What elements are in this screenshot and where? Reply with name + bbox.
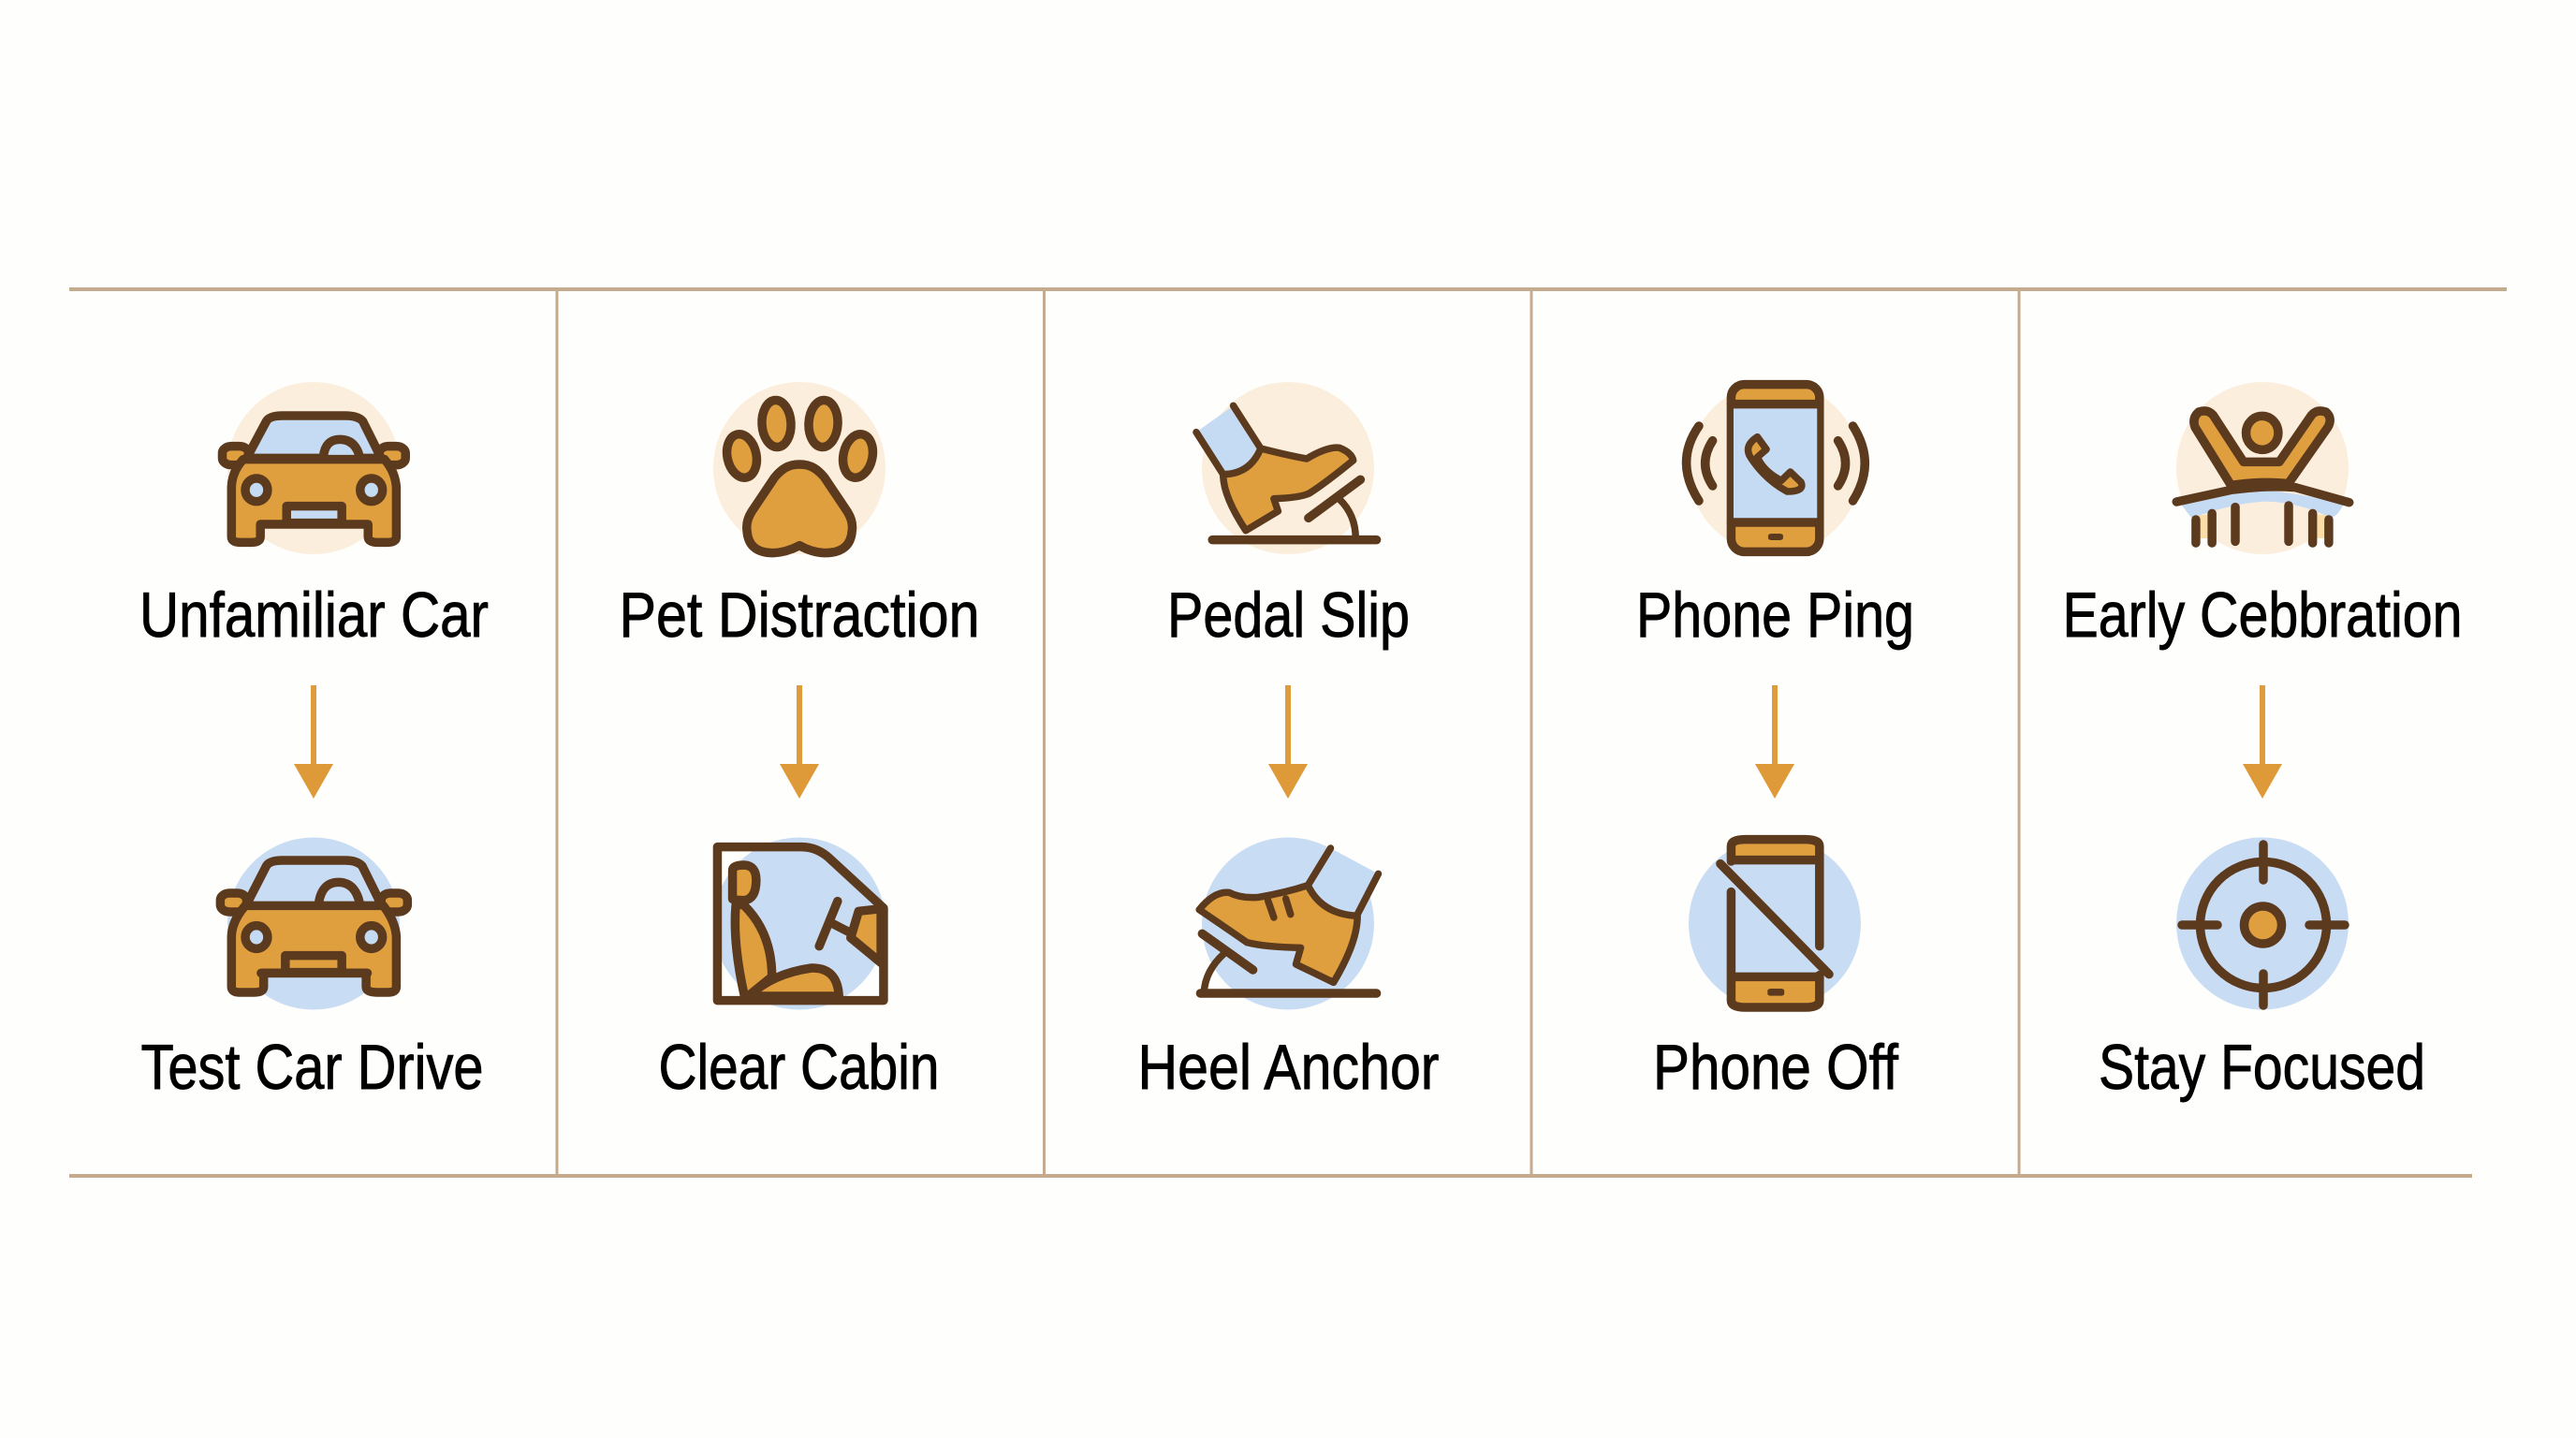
icon: phone ping	[1687, 382, 1865, 554]
label: Early Cebbration: Early Cebbration	[2063, 580, 2462, 651]
label: Phone Off: Phone Off	[1653, 1032, 1898, 1103]
label: Test Car Drive: Test Car Drive	[140, 1032, 483, 1103]
arrow: down	[2243, 685, 2282, 799]
label: Unfamiliar Car: Unfamiliar Car	[139, 580, 489, 651]
panel: early celebration to stay focused	[2063, 382, 2462, 1103]
label: Phone Ping: Phone Ping	[1636, 580, 1914, 651]
label: Pedal Slip: Pedal Slip	[1167, 580, 1410, 651]
arrow: down	[1268, 685, 1308, 799]
panel: pedal slip to heel anchor	[1138, 382, 1440, 1103]
icon: test car drive	[220, 837, 407, 1009]
arrow: down	[780, 685, 819, 799]
label: Pet Distraction: Pet Distraction	[620, 580, 979, 651]
icon: unfamiliar car	[222, 382, 405, 554]
icon: phone off	[1689, 837, 1861, 1009]
panel: pet distraction to clear cabin	[620, 382, 979, 1103]
icon: early celebration	[2176, 382, 2349, 554]
icon: heel anchor	[1199, 837, 1379, 1009]
label: Stay Focused: Stay Focused	[2099, 1032, 2425, 1103]
label: Clear Cabin: Clear Cabin	[659, 1032, 940, 1103]
icon: target	[2176, 837, 2349, 1009]
label: Heel Anchor: Heel Anchor	[1138, 1032, 1440, 1103]
panel: phone ping to phone off	[1636, 382, 1914, 1103]
icon: pedal slip	[1196, 382, 1377, 554]
arrow: down	[294, 685, 333, 799]
icon: clear cabin	[713, 837, 886, 1009]
panel: unfamiliar car to test car drive	[139, 382, 489, 1103]
icon: paw	[713, 382, 886, 554]
arrow: down	[1755, 685, 1794, 799]
